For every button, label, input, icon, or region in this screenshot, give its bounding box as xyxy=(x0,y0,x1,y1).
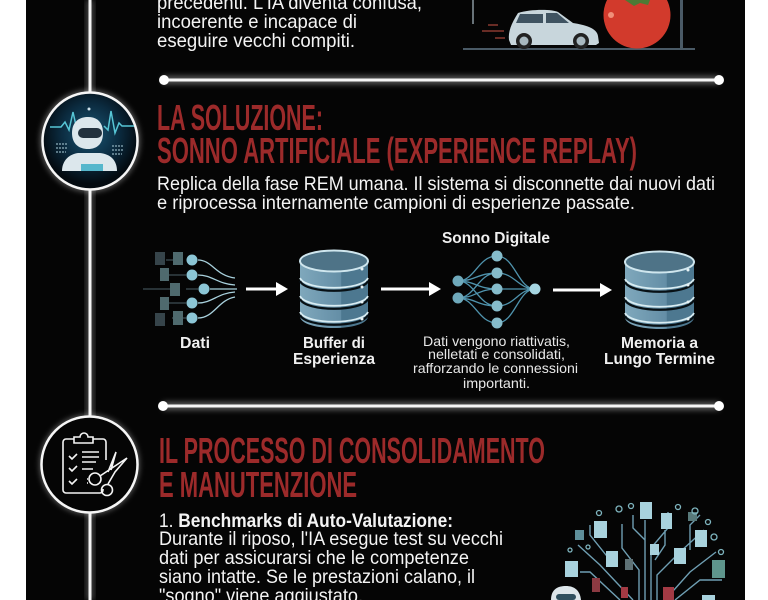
benchmark text: 1. Benchmarks di Auto-Valutazione: xyxy=(159,510,453,532)
caption: sonno digitale: nelletati e consolidati, xyxy=(428,346,565,362)
benchmark text: Durante il riposo, l'IA esegue test su vecchi xyxy=(159,528,503,550)
divider 2 xyxy=(158,401,724,411)
icon: database buffer xyxy=(300,250,368,328)
benchmark text xyxy=(159,510,503,600)
caption: sonno digitale: importanti. xyxy=(463,375,530,391)
label: memoria a lungo termine: Lungo Termine xyxy=(604,351,715,368)
divider 1 xyxy=(159,75,724,85)
heading: la soluzione: LA SOLUZIONE: xyxy=(157,97,323,138)
arrow 3 xyxy=(553,283,612,297)
solution description: Replica della fase REM umana. Il sistema si disconnette dai nuovi dati xyxy=(157,173,715,195)
intro text: problem continuation: incoerente e incapace di xyxy=(157,11,357,33)
icon: database long term memory xyxy=(625,252,694,329)
label: buffer di esperienza: Esperienza xyxy=(293,351,375,368)
icon: neural network xyxy=(452,250,540,328)
arrow 2 xyxy=(381,282,441,296)
illustration: knowledge tree xyxy=(551,502,725,600)
label: memoria a lungo termine xyxy=(604,335,715,368)
solution description xyxy=(157,173,715,214)
heading: processo: E MANUTENZIONE xyxy=(159,464,357,505)
icon: robot with brain waves xyxy=(40,90,140,192)
label: dati: Dati xyxy=(180,335,210,352)
label: buffer di esperienza xyxy=(293,335,375,368)
caption: sonno digitale: Dati vengono riattivatis, xyxy=(423,333,570,349)
label: sonno digitale: Sonno Digitale xyxy=(442,230,550,247)
caption: sonno digitale: rafforzando le connessioni xyxy=(413,360,578,376)
benchmark text: dati per assicurarsi che le competenze xyxy=(159,547,469,569)
icon: checklist and scissors xyxy=(40,414,140,514)
timeline line xyxy=(86,0,94,600)
label: memoria a lungo termine: Memoria a xyxy=(621,335,698,352)
intro text: problem continuation xyxy=(157,0,422,52)
heading: processo xyxy=(159,430,545,505)
icon: data funnel xyxy=(143,252,237,326)
illustration: car and giant tomato xyxy=(463,0,695,50)
intro text: problem continuation: eseguire vecchi compiti. xyxy=(157,30,355,52)
caption: sonno digitale xyxy=(413,333,578,391)
benchmark text: siano intatte. Se le prestazioni calano, il xyxy=(159,566,475,588)
heading: la soluzione xyxy=(157,97,637,171)
arrow 1 xyxy=(246,282,288,296)
label: buffer di esperienza: Buffer di xyxy=(303,335,365,352)
solution description: e riprocessa internamente campioni di esperienze passate. xyxy=(157,192,635,214)
